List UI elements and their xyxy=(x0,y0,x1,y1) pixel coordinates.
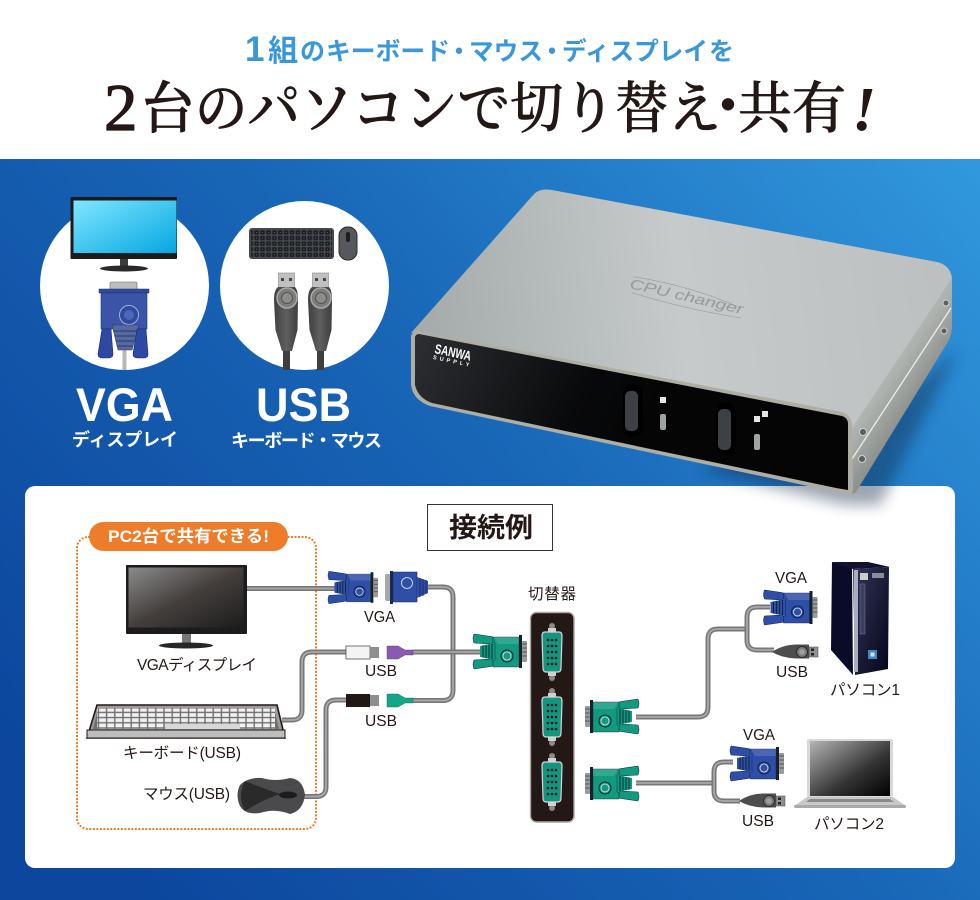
label: VGA display: VGA xyxy=(76,378,173,431)
main title: ! xyxy=(852,76,876,144)
icon: display xyxy=(126,565,247,648)
cables: left group xyxy=(247,587,480,796)
label: USB keyboard mouse: USB xyxy=(256,378,351,431)
icon: keyboard xyxy=(87,705,285,738)
header background xyxy=(0,0,980,159)
subtitle: 組 xyxy=(268,35,298,68)
label: VGA display: ディスプレイ xyxy=(72,429,178,450)
main title: 共有 xyxy=(738,79,846,141)
badge: PC2 shared: PC2台で共有できる! xyxy=(108,526,269,546)
icon: cyan monitor xyxy=(70,197,177,272)
subtitle xyxy=(245,30,734,69)
product name on lid xyxy=(628,275,747,320)
port 1 xyxy=(542,623,562,681)
front black panel xyxy=(411,331,853,494)
white diagram panel xyxy=(25,486,955,868)
connector: VGA green input xyxy=(472,634,527,670)
icon: black keyboard xyxy=(249,228,334,259)
label: PC2: パソコン2 xyxy=(814,816,884,833)
label: switcher: 切替器 xyxy=(528,585,576,603)
circle: USB keyboard and mouse xyxy=(220,201,389,370)
switch 1 xyxy=(623,384,666,437)
switch 2 xyxy=(716,403,768,455)
subtitle: ディスプレイ xyxy=(562,37,708,66)
subtitle: を xyxy=(709,38,734,66)
subtitle: マウス xyxy=(469,38,543,66)
icon: mouse xyxy=(238,778,305,814)
port 2 xyxy=(542,688,562,746)
label: USB keyboard mouse xyxy=(231,378,382,451)
connector: VGA green to PC2 xyxy=(585,766,640,802)
connector: USB plug PC2 xyxy=(739,794,785,808)
icon: USB plug right xyxy=(308,273,332,370)
label: VGA PC2: VGA xyxy=(743,727,776,744)
right side face xyxy=(850,278,952,494)
brand logo xyxy=(432,341,473,369)
icon: mouse xyxy=(339,227,357,260)
brand logo: SUPPLY xyxy=(432,355,470,369)
product photo: switch box xyxy=(411,190,958,505)
label: mouse: マウス(USB) xyxy=(143,785,230,803)
main title xyxy=(104,71,876,145)
connector: VGA blue PC1 xyxy=(763,590,818,626)
label: VGA display: VGAディスプレイ xyxy=(137,655,257,674)
product name on lid: CPU changer xyxy=(628,275,747,317)
connector: VGA green to PC1 xyxy=(585,698,640,734)
connector: VGA female blue xyxy=(385,571,428,604)
icon: tower PC xyxy=(831,562,890,675)
label: VGA PC1: VGA xyxy=(775,570,808,587)
subtitle: の xyxy=(300,38,325,66)
label: USB: USB xyxy=(365,713,397,730)
port 3 xyxy=(542,753,562,811)
label: USB: USB xyxy=(365,663,397,680)
heading: connection example xyxy=(428,504,552,550)
subtitle: ・ xyxy=(539,38,565,66)
label: VGA: VGA xyxy=(364,609,396,626)
main title: ・ xyxy=(700,77,756,139)
connector: VGA blue PC2 xyxy=(730,746,784,782)
label: USB PC1: USB xyxy=(776,664,808,681)
label: keyboard: キーボード(USB) xyxy=(123,744,241,762)
switch box with VGA ports xyxy=(530,612,574,822)
brand logo: SANWA xyxy=(433,341,473,364)
icon: VGA connector xyxy=(98,282,149,370)
connector: USB plug PC1 xyxy=(772,644,818,658)
connector: VGA male blue xyxy=(328,571,378,604)
icon: laptop xyxy=(794,739,906,808)
connector: USB black and green PS/2 xyxy=(346,694,413,707)
subtitle: ・ xyxy=(446,38,472,66)
main title: 台のパソコンで切り替え xyxy=(142,79,721,141)
subtitle: 1 xyxy=(245,30,264,69)
main title: 2 xyxy=(104,71,138,145)
heading: connection example: 接続例 xyxy=(449,513,533,543)
top face xyxy=(411,190,952,428)
label: PC1: パソコン1 xyxy=(830,682,900,699)
subtitle: キーボード xyxy=(326,38,450,66)
cables: right group xyxy=(636,607,774,801)
label: USB PC2: USB xyxy=(742,813,774,830)
icon: USB plug left xyxy=(274,273,298,370)
label: USB keyboard mouse: キーボード・マウス xyxy=(231,431,382,451)
badge: PC2 shared xyxy=(89,522,288,551)
dotted box: devices shared by 2 PCs xyxy=(77,537,316,829)
connector: USB white and purple PS/2 xyxy=(346,646,413,659)
circle: VGA display xyxy=(40,197,209,370)
